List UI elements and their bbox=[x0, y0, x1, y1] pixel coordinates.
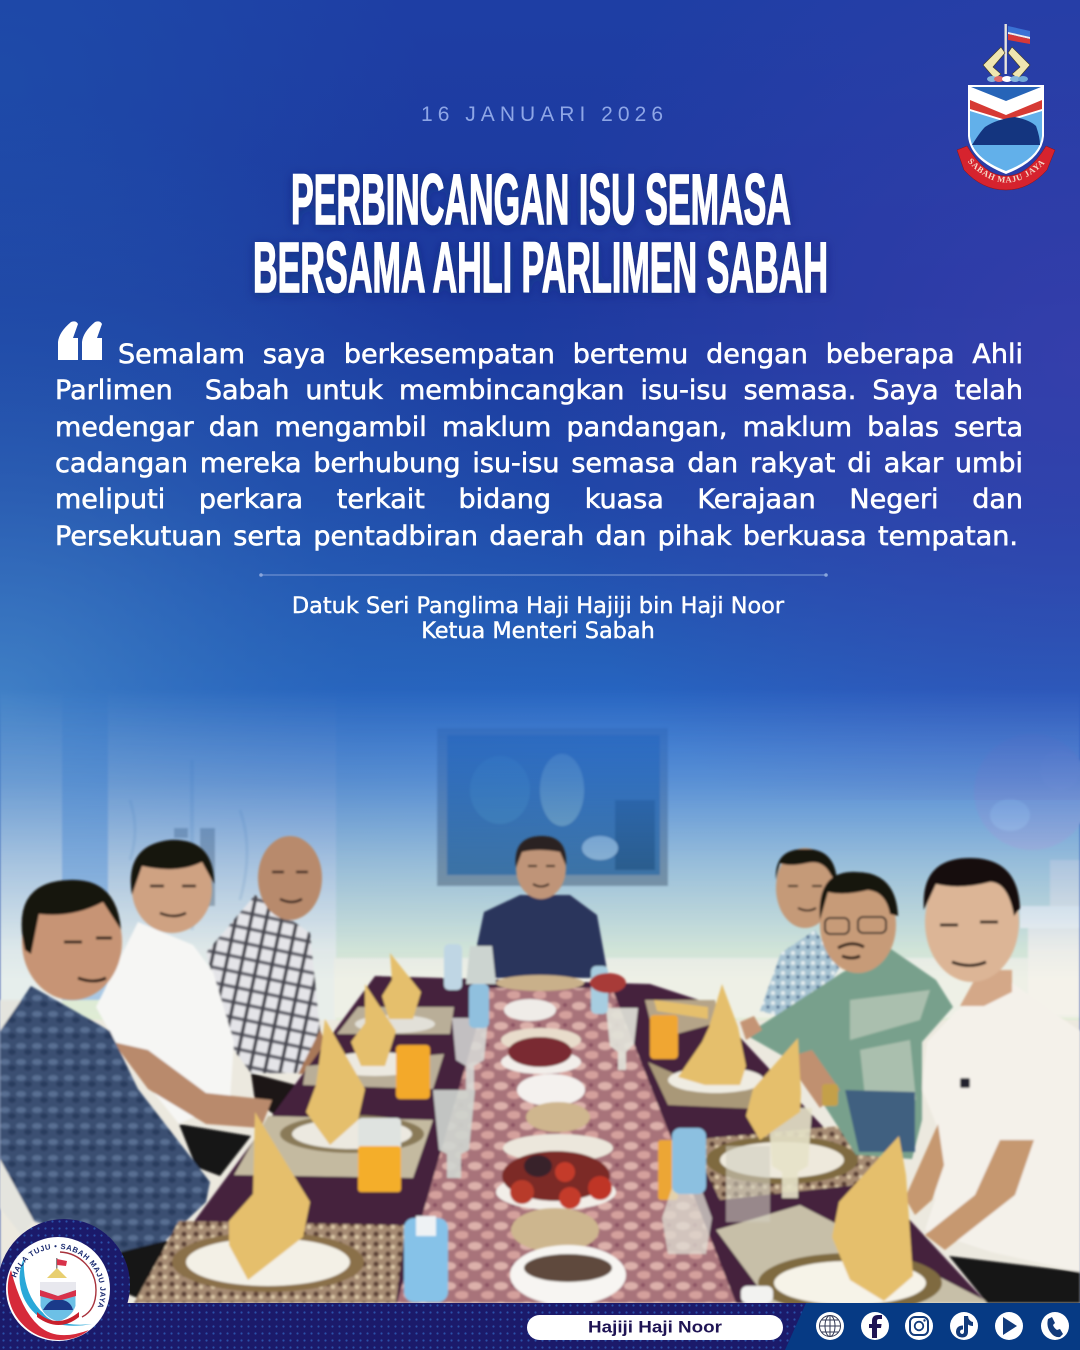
arms holding flag bbox=[983, 47, 1030, 79]
quote text block: medengar dan mengambil maklum pandangan, maklum balas serta bbox=[55, 412, 1023, 443]
icon: Sabah coat of arms bbox=[956, 24, 1056, 190]
table cloth bbox=[134, 976, 987, 1303]
food dishes bbox=[496, 975, 626, 1305]
quote text block: cadangan mereka berhubung isu-isu semasa dan rakyat di akar umbi bbox=[55, 448, 1023, 479]
person 6: white shirt bbox=[905, 858, 1080, 1303]
name pill: Hajiji Haji Noor bbox=[588, 1318, 723, 1336]
table runner bbox=[397, 988, 736, 1303]
person 5: green batik shirt bbox=[740, 872, 953, 1159]
door panels bbox=[0, 660, 336, 1030]
date: 16 JANUARI 2026 bbox=[421, 103, 663, 126]
wall painting bbox=[437, 728, 668, 886]
icon: globe bbox=[816, 1312, 844, 1340]
attribution: Datuk Seri Panglima Haji Hajiji bin Haji Noor bbox=[292, 593, 784, 619]
icon: facebook bbox=[861, 1312, 889, 1340]
ribbon with motto: SABAH MAJU JAYA bbox=[968, 158, 1045, 183]
icon: Hala Tuju logo badge: HALA TUJU • SABAH MAJU JAYA bbox=[11, 1244, 106, 1307]
mini coat of arms bbox=[37, 1258, 79, 1325]
person 1: blue batik shirt bbox=[0, 880, 210, 1300]
person 2: white shirt bbox=[96, 840, 272, 1176]
beads bbox=[987, 76, 1028, 82]
photo: table and people bbox=[0, 836, 1080, 1313]
icon: Hala Tuju logo badge bbox=[0, 1219, 130, 1341]
divider bbox=[259, 573, 828, 577]
place mats bbox=[134, 1000, 990, 1303]
icon: tiktok bbox=[950, 1312, 978, 1340]
social icons bbox=[816, 1312, 1069, 1340]
quote text block: meliputi perkara terkait bidang kuasa Kerajaan Negeri dan bbox=[55, 484, 1023, 515]
person center: navy jacket bbox=[470, 836, 607, 978]
quote text block bbox=[55, 339, 1023, 552]
flower vase and column bbox=[974, 734, 1080, 1015]
quote text block: Semalam saya berkesempatan bertemu dengan beberapa Ahli bbox=[118, 339, 1023, 370]
photo: dining room wall and decor bbox=[0, 660, 1080, 1310]
title bbox=[253, 161, 828, 308]
yellow napkins bbox=[229, 953, 746, 1280]
quote text block: Parlimen Sabah untuk membincangkan isu-isu semasa. Saya telah bbox=[55, 375, 1023, 406]
foreground napkins bbox=[746, 1038, 913, 1301]
icon: instagram bbox=[905, 1312, 933, 1340]
bottom bar bbox=[0, 1303, 1080, 1350]
ribbon with motto bbox=[956, 146, 1056, 190]
quote text block: Persekutuan serta pentadbiran daerah dan pihak berkuasa tempatan. bbox=[55, 521, 1018, 552]
water glasses and bottles bbox=[404, 944, 812, 1303]
icon: play bbox=[995, 1312, 1023, 1340]
glasses of juice bbox=[358, 1015, 678, 1200]
person 3: plaid shirt bbox=[206, 836, 360, 1115]
flag bbox=[1004, 24, 1030, 74]
plates bbox=[172, 1015, 942, 1313]
white chair bbox=[0, 1000, 34, 1236]
person 4: light batik shirt bbox=[760, 848, 839, 1023]
icon: phone bbox=[1041, 1312, 1069, 1340]
wainscoting bbox=[334, 958, 1080, 1018]
name pill bbox=[527, 1315, 783, 1340]
background gradient fading into the photo bbox=[0, 0, 1080, 1000]
attribution: Ketua Menteri Sabah bbox=[421, 618, 655, 644]
attribution bbox=[292, 593, 784, 644]
icon: quotation mark bbox=[58, 321, 102, 360]
shield bbox=[968, 85, 1044, 174]
